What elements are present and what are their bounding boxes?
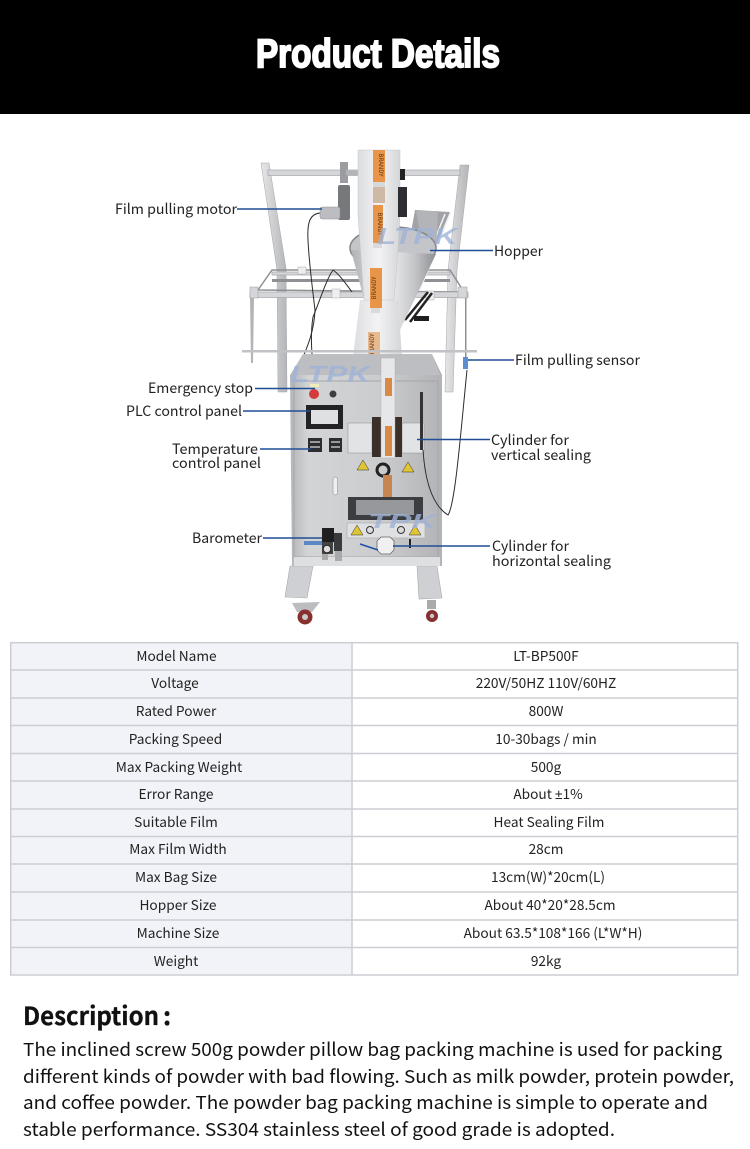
callout: barometer — [192, 528, 322, 548]
specification table — [10, 642, 738, 975]
plc touch panel — [306, 405, 343, 429]
table left column background — [11, 643, 352, 975]
row: hopper size — [139, 894, 616, 914]
row: hopper size: About 40*20*28.5cm — [484, 894, 616, 914]
callout: film pulling motor: Film pulling motor — [115, 199, 238, 219]
row: max film width: Max Film Width — [129, 838, 227, 858]
callout: cylinder for horizontal sealing: Cylinder for — [492, 536, 570, 556]
emergency stop button — [309, 384, 336, 399]
row: max film width — [129, 838, 563, 858]
row: packing speed: 10-30bags / min — [495, 728, 597, 748]
watermark cabinet: LTPK — [290, 361, 372, 387]
description paragraph: and coffee powder. The powder bag packing machine is simple to operate and — [23, 1089, 708, 1115]
row: max film width: 28cm — [529, 838, 563, 858]
row: machine size: About 63.5*108*166 (L*W*H) — [464, 922, 642, 942]
row: weight: Weight — [154, 950, 198, 970]
film former and bag strip — [358, 150, 407, 358]
row: voltage: 220V/50HZ 110V/60HZ — [476, 672, 616, 692]
horizontal sealing assembly — [347, 497, 425, 554]
watermark lower: TPK — [368, 511, 439, 533]
callout: hopper — [430, 241, 544, 261]
description paragraph: different kinds of powder with bad flowing. Such as milk powder, protein powder, — [23, 1063, 734, 1089]
row: machine size — [137, 922, 642, 942]
control cabinet — [290, 354, 467, 566]
callout: cylinder for horizontal sealing: horizontal sealing — [492, 551, 611, 571]
hopper — [350, 210, 450, 330]
description paragraph — [23, 1036, 734, 1142]
central film tube — [381, 358, 395, 507]
callout: cylinder for vertical sealing — [417, 430, 591, 465]
callout: cylinder for vertical sealing: Cylinder for — [491, 430, 570, 450]
horizontal bar — [242, 350, 477, 352]
description heading: Description — [23, 997, 159, 1033]
callout: temperature control panel: control panel — [172, 453, 261, 473]
callout: emergency stop: Emergency stop — [148, 378, 253, 398]
callout: temperature control panel — [172, 439, 311, 473]
callout: temperature control panel: Temperature — [172, 439, 258, 459]
row: packing speed: Packing Speed — [129, 728, 222, 748]
row: rated power — [136, 700, 563, 720]
wires — [293, 213, 352, 384]
row: hopper size: Hopper Size — [139, 894, 217, 914]
film former and bag strip: BRANDY — [367, 333, 376, 356]
row: max bag size — [135, 866, 605, 886]
film former and bag strip: BRANDY — [377, 154, 386, 177]
description paragraph: stable performance. SS304 stainless steel of good grade is adopted. — [23, 1116, 615, 1142]
row: suitable film — [134, 811, 604, 831]
header banner — [0, 0, 750, 114]
row: weight — [154, 950, 561, 970]
temperature controllers — [308, 438, 342, 452]
row: max bag size: Max Bag Size — [135, 866, 217, 886]
row: suitable film: Suitable Film — [134, 811, 218, 831]
film former and bag strip: BRANDY — [369, 276, 378, 299]
handle — [333, 477, 338, 495]
row: max bag size: 13cm(W)*20cm(L) — [491, 866, 605, 886]
row: voltage — [151, 672, 616, 692]
watermark upper: LTPK — [377, 223, 459, 249]
callout: barometer: Barometer — [192, 528, 263, 548]
row: max packing weight: 500g — [531, 756, 562, 776]
description paragraph: The inclined screw 500g powder pillow bag packing machine is used for packing — [23, 1036, 722, 1062]
callout: film pulling sensor: Film pulling sensor — [515, 350, 641, 370]
machine upper frame — [250, 163, 469, 392]
row: rated power: 800W — [529, 700, 563, 720]
row: error range — [138, 783, 583, 803]
row: max packing weight: Max Packing Weight — [116, 756, 242, 776]
row: error range: About ±1% — [513, 783, 583, 803]
row: suitable film: Heat Sealing Film — [494, 811, 604, 831]
former back plate — [353, 300, 402, 357]
film pulling sensor part — [463, 357, 468, 369]
legs and casters — [285, 566, 442, 624]
row: voltage: Voltage — [151, 672, 199, 692]
vertical sealing assembly — [348, 417, 424, 476]
description heading: : — [163, 997, 171, 1033]
barometer unit — [304, 528, 342, 561]
row: packing speed — [129, 728, 597, 748]
title: Product Details — [256, 32, 500, 76]
film pulling motor — [320, 162, 360, 220]
row: model name: LT-BP500F — [513, 645, 579, 665]
row: model name: Model Name — [136, 645, 217, 665]
row: weight: 92kg — [531, 950, 561, 970]
machine illustration — [242, 150, 477, 624]
callout: cylinder for vertical sealing: vertical sealing — [491, 445, 591, 465]
switch column and cable — [420, 370, 467, 515]
callout: cylinder for horizontal sealing — [393, 536, 611, 571]
row: error range: Error Range — [138, 783, 214, 803]
callout: hopper: Hopper — [494, 241, 544, 261]
row: max packing weight — [116, 756, 562, 776]
row: rated power: Rated Power — [136, 700, 217, 720]
row: model name — [136, 645, 579, 665]
film former and bag strip: BRANDY — [376, 213, 385, 236]
row: machine size: Machine Size — [137, 922, 219, 942]
callout: plc control panel: PLC control panel — [126, 401, 242, 421]
